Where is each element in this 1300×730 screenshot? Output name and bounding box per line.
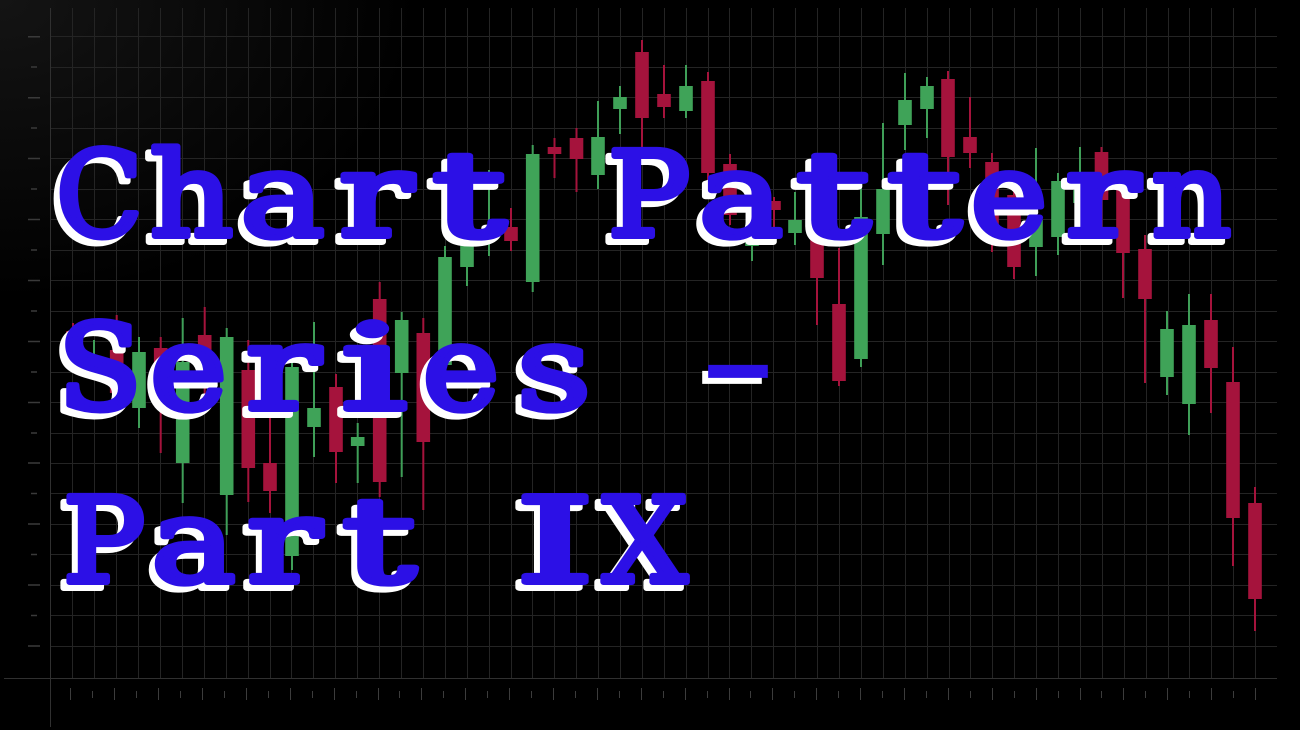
x-axis ticks bbox=[70, 688, 1256, 700]
title: X bbox=[603, 473, 687, 610]
title: - bbox=[703, 294, 773, 431]
title: e bbox=[150, 301, 227, 438]
title: s bbox=[517, 301, 591, 438]
title: h bbox=[150, 128, 233, 265]
red candlesticks bbox=[66, 40, 1262, 631]
title: a bbox=[151, 472, 236, 610]
title: e bbox=[971, 128, 1047, 265]
title: P bbox=[608, 127, 690, 264]
title: r bbox=[1065, 127, 1141, 264]
title: t bbox=[342, 473, 416, 610]
title: S bbox=[58, 300, 142, 437]
y-axis ticks bbox=[28, 37, 40, 646]
title: r bbox=[339, 127, 414, 264]
title: t bbox=[432, 127, 506, 264]
title: r bbox=[246, 300, 321, 437]
title: t bbox=[796, 127, 870, 264]
title: t bbox=[887, 127, 961, 264]
title: a bbox=[240, 126, 325, 264]
title: a bbox=[699, 126, 783, 264]
title: C bbox=[56, 128, 143, 265]
title: i bbox=[341, 300, 407, 437]
title: P bbox=[63, 473, 145, 610]
title: I bbox=[515, 472, 595, 610]
green candlesticks bbox=[87, 65, 1196, 570]
title: e bbox=[423, 301, 499, 438]
title: r bbox=[247, 473, 322, 610]
title: n bbox=[1152, 127, 1231, 264]
